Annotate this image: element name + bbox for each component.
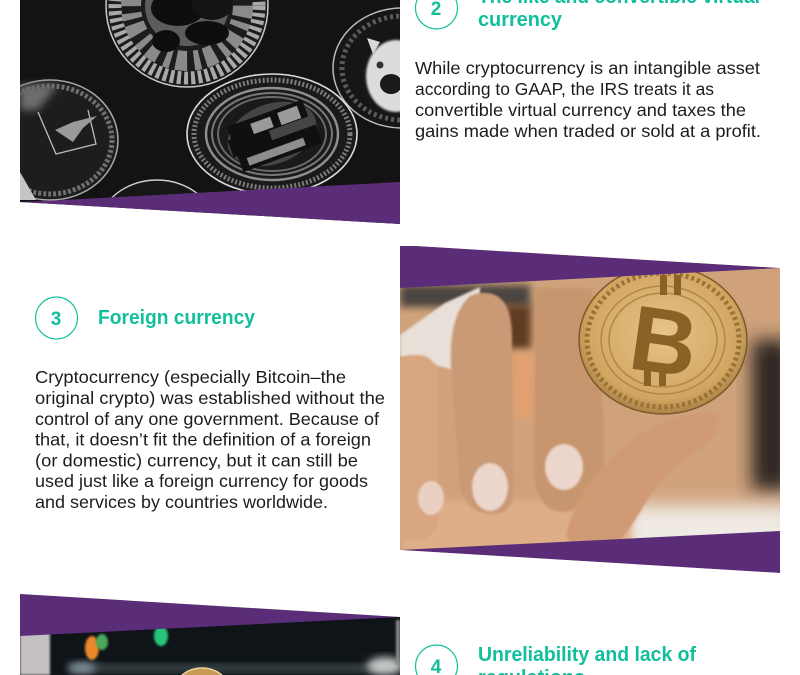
body text 3: that, it doesn’t fit the definition of a foreign [35, 430, 371, 450]
icon: gold bitcoin coin [579, 266, 747, 414]
body text 2: convertible virtual currency and taxes the [415, 100, 746, 120]
bitcoin symbol: B [624, 287, 704, 397]
heading 4 [478, 644, 696, 675]
panel: trading screen photo [20, 594, 403, 675]
body text 2: gains made when traded or sold at a profit. [415, 121, 761, 141]
number badge 2 [416, 0, 458, 29]
body text 2: according to GAAP, the IRS treats it as [415, 79, 714, 99]
purple band bottom [400, 531, 780, 573]
heading 3: Foreign currency [98, 307, 256, 329]
icon: bitcoin silver coin [187, 74, 357, 194]
purple band top [400, 245, 780, 288]
body text 2: While cryptocurrency is an intangible asset [415, 58, 760, 78]
number badge 3 [36, 297, 78, 339]
white cut [20, 594, 400, 617]
white top cut [400, 245, 780, 268]
bitcoin symbol [632, 275, 692, 386]
heading 4: Unreliability and lack of [478, 644, 696, 666]
icon: partial coin bottom [104, 179, 214, 214]
chart lights [85, 626, 168, 660]
icon: dogecoin [332, 7, 400, 129]
white bottom cut [400, 550, 780, 573]
body text 3: (or domestic) currency, but it can still be [35, 450, 358, 470]
panel: hand holding gold bitcoin photo [392, 245, 795, 573]
body text 2 [415, 58, 761, 141]
number badge 4 [416, 645, 458, 675]
body text 3: Cryptocurrency (especially Bitcoin–the [35, 367, 346, 387]
heading 2: currency [478, 9, 563, 31]
purple band [20, 594, 400, 636]
left monitor edge [20, 630, 50, 675]
body text 3: used just like a foreign currency for goods [35, 471, 368, 491]
photo background tones [400, 285, 795, 565]
icon: ripple coin [106, 0, 268, 87]
fingernails [418, 444, 583, 515]
fingers [392, 288, 719, 559]
block: item 4 [416, 644, 696, 675]
number badge 3: 3 [51, 309, 61, 330]
purple band [20, 182, 400, 224]
block: item 2 [415, 0, 761, 141]
body text 3: control of any one government. Because of [35, 409, 379, 429]
icon: gold coin top [181, 667, 223, 675]
white cut below photo [20, 202, 400, 225]
panel: silver crypto coins photo [20, 0, 400, 224]
block: item 3 [35, 297, 385, 512]
blurred chart bars [68, 620, 403, 675]
heading 2 [478, 0, 760, 31]
body text 3: original crypto) was established without the [35, 388, 385, 408]
icon: litecoin coin left [20, 79, 119, 201]
body text 3 [35, 367, 385, 512]
body text 3: and services by countries worldwide. [35, 492, 328, 512]
